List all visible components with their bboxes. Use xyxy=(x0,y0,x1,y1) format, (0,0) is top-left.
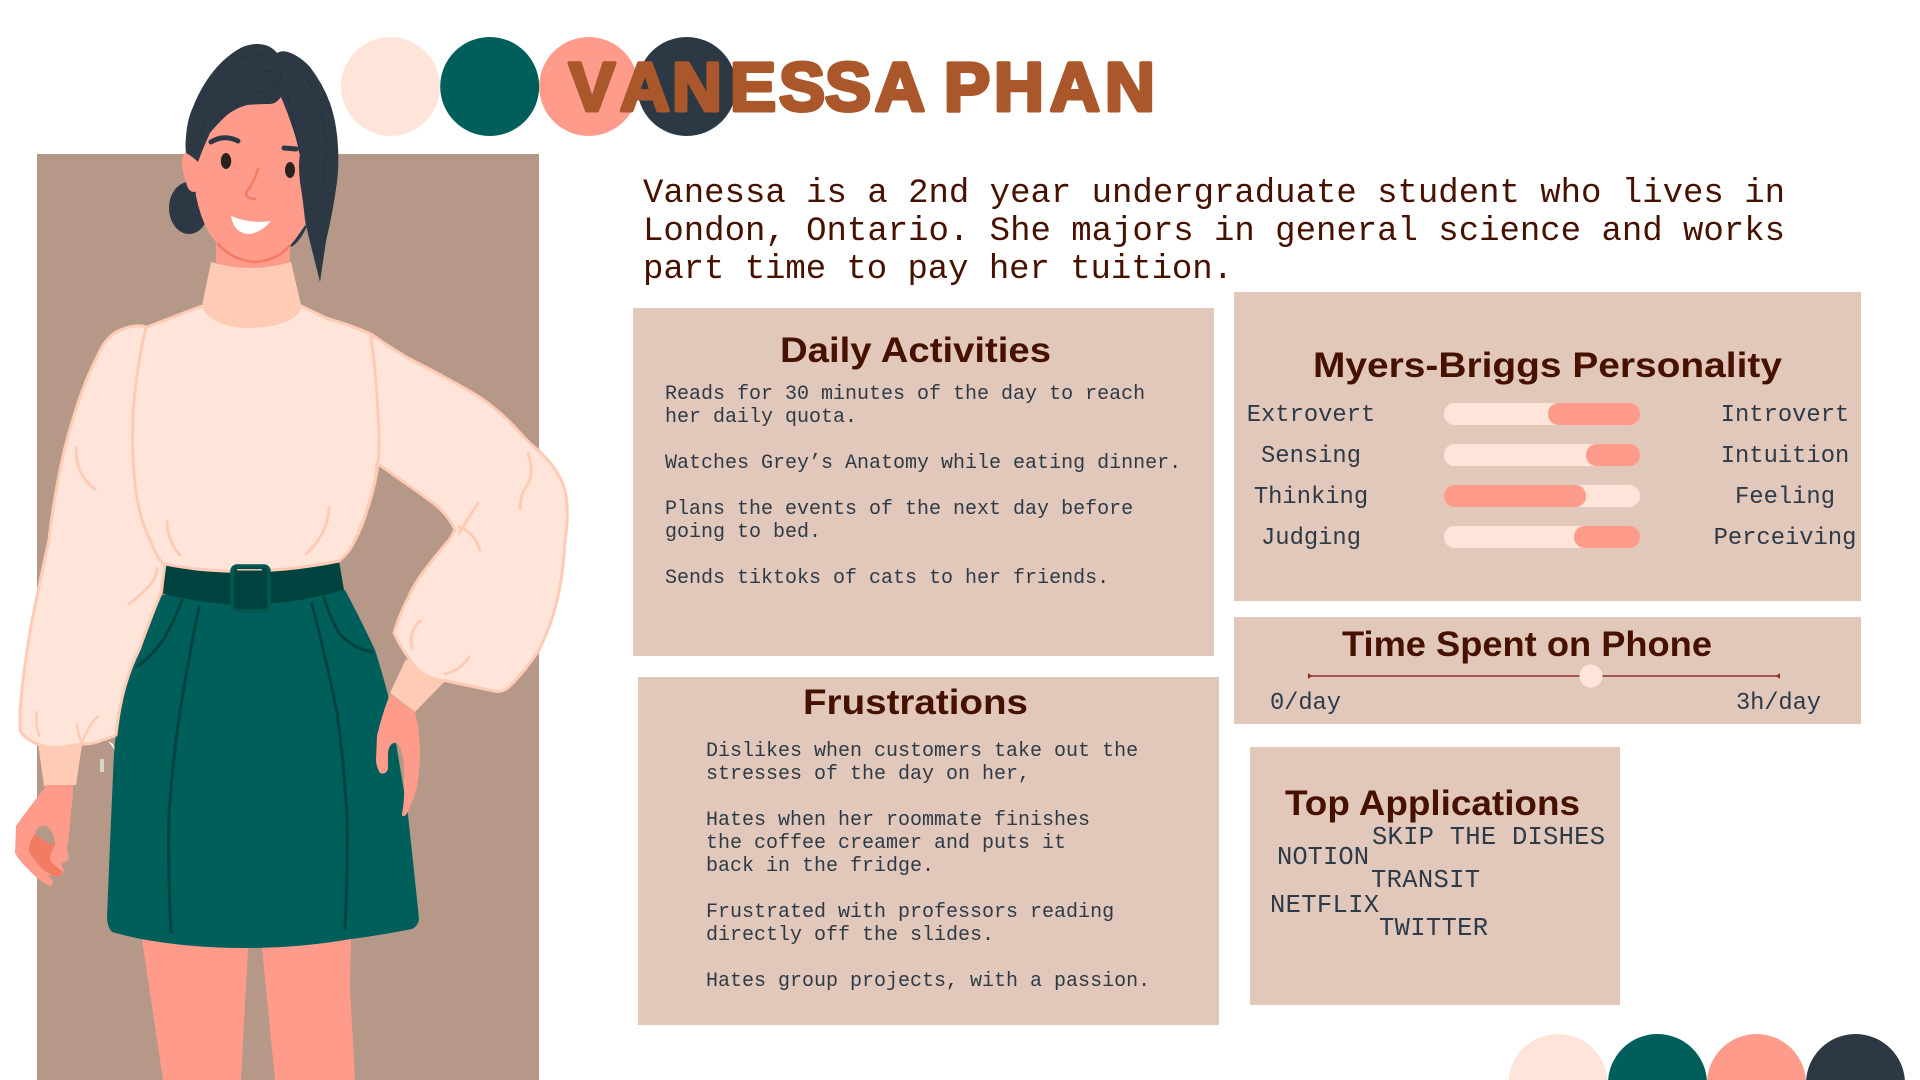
chart row: sensing / intuition xyxy=(1261,443,1849,470)
panel: daily activities xyxy=(633,308,1214,656)
chart row: thinking / feeling: Feeling xyxy=(1735,484,1835,511)
text block: frustrations list: back in the fridge. xyxy=(706,855,934,878)
text block: daily activities list: going to bed. xyxy=(665,521,821,544)
chart row: thinking / feeling xyxy=(1254,484,1835,511)
intro paragraph xyxy=(643,175,1785,289)
text block: frustrations list: the coffee creamer and puts it xyxy=(706,832,1066,855)
colour swatches: top row xyxy=(341,37,736,136)
panel: myers-briggs personality xyxy=(1234,292,1861,601)
text block: frustrations list: stresses of the day on her, xyxy=(706,763,1030,786)
text block: application names: SKIP THE DISHES xyxy=(1372,823,1605,852)
heading: top applications: Top Applications xyxy=(1285,784,1580,823)
panel: time spent on phone xyxy=(1234,617,1861,724)
colour swatches: bottom row xyxy=(1508,1034,1905,1080)
chart row: extrovert / introvert: Extrovert xyxy=(1247,402,1375,429)
text block: application names: TRANSIT xyxy=(1371,866,1480,895)
text block: frustrations list xyxy=(706,740,1150,993)
chart row: judging / perceiving: Judging xyxy=(1261,525,1361,552)
panel: portrait backdrop xyxy=(37,154,539,1080)
text block: daily activities list: Sends tiktoks of cats to her friends. xyxy=(665,567,1109,590)
text block: frustrations list: directly off the slides. xyxy=(706,924,994,947)
text block: frustrations list: Hates when her roommate finishes xyxy=(706,809,1090,832)
text block: application names: TWITTER xyxy=(1379,914,1488,943)
intro paragraph: London, Ontario. She majors in general science and works xyxy=(643,213,1785,251)
chart row: sensing / intuition: Intuition xyxy=(1721,443,1849,470)
heading: myers-briggs personality: Myers-Briggs Personality xyxy=(1313,346,1783,385)
scale label: maximum: 3h/day xyxy=(1736,690,1821,717)
chart row: thinking / feeling: Thinking xyxy=(1254,484,1368,511)
text block: frustrations list: Dislikes when customers take out the xyxy=(706,740,1138,763)
chart row: sensing / intuition: Sensing xyxy=(1261,443,1361,470)
text block: daily activities list: Reads for 30 minutes of the day to reach xyxy=(665,383,1145,406)
text block: daily activities list: Watches Grey’s Anatomy while eating dinner. xyxy=(665,452,1181,475)
chart row: judging / perceiving xyxy=(1261,525,1856,552)
text block: daily activities list xyxy=(665,383,1181,590)
text block: daily activities list: her daily quota. xyxy=(665,406,857,429)
heading: frustrations: Frustrations xyxy=(803,683,1028,722)
intro paragraph: part time to pay her tuition. xyxy=(643,251,1233,289)
panel: frustrations xyxy=(638,677,1219,1025)
text block: frustrations list: Frustrated with professors reading xyxy=(706,901,1114,924)
chart row: extrovert / introvert: Introvert xyxy=(1721,402,1849,429)
slider xyxy=(1308,664,1780,688)
title: VANESSA PHAN xyxy=(569,49,1155,126)
text block: application names: NOTION xyxy=(1277,843,1369,872)
illustration: woman in blouse and teal skirt xyxy=(15,44,567,1080)
panel: top applications xyxy=(1250,747,1620,1005)
text block: daily activities list: Plans the events of the next day before xyxy=(665,498,1133,521)
heading: daily activities: Daily Activities xyxy=(780,331,1051,370)
intro paragraph: Vanessa is a 2nd year undergraduate student who lives in xyxy=(643,175,1785,213)
chart row: judging / perceiving: Perceiving xyxy=(1714,525,1856,552)
heading: time spent on phone: Time Spent on Phone xyxy=(1342,625,1712,664)
scale label: minimum: 0/day xyxy=(1270,690,1341,717)
text block: application names xyxy=(1270,823,1605,943)
text block: frustrations list: Hates group projects, with a passion. xyxy=(706,970,1150,993)
text block: application names: NETFLIX xyxy=(1270,891,1379,920)
chart row: extrovert / introvert xyxy=(1247,402,1849,429)
